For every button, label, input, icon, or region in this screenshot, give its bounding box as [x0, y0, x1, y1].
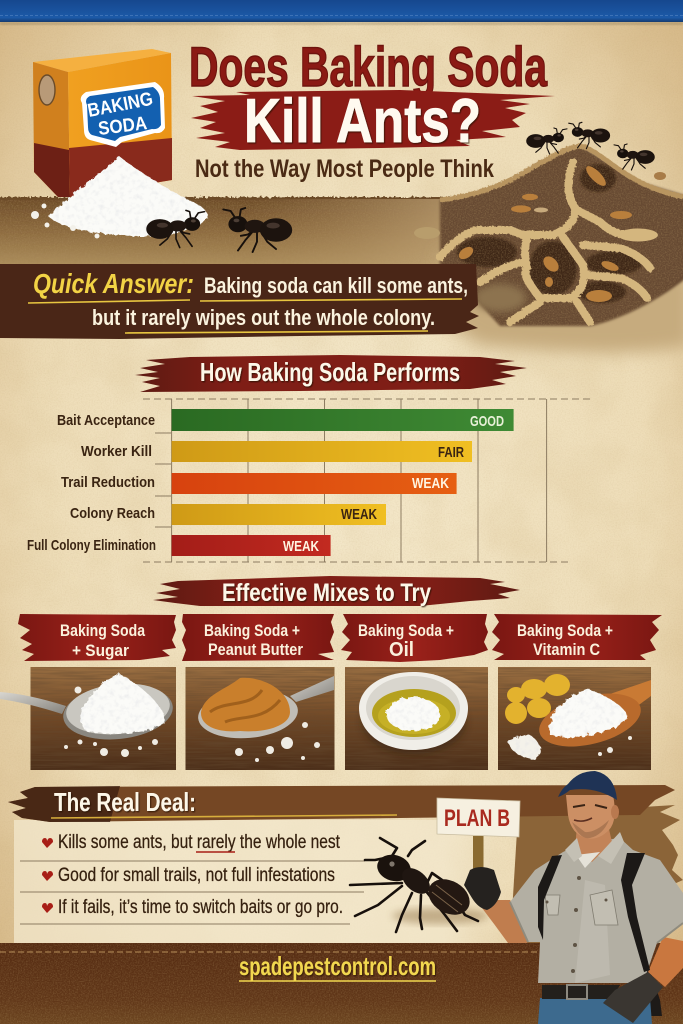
- bar: colony reach: Colony Reach: [70, 505, 155, 522]
- icon: large ant: [350, 838, 488, 932]
- dark banner end: [8, 786, 120, 822]
- bar: colony reach: WEAK: [341, 506, 377, 523]
- bar: full colony elimination: Full Colony Elimination: [27, 537, 156, 554]
- title line 1: Does Baking Soda: [189, 35, 548, 98]
- mix label 4: Baking Soda +: [517, 622, 613, 640]
- bar: trail reduction: [61, 473, 457, 494]
- heading: effective mixes to try: [153, 576, 520, 607]
- panel: baking soda + vitamin c: [492, 614, 662, 770]
- box top: [33, 49, 171, 72]
- blue label: [81, 82, 165, 147]
- mix label 2: Peanut Butter: [208, 641, 303, 659]
- collar: [565, 832, 624, 864]
- box front: [68, 53, 172, 197]
- nest soil: [440, 145, 683, 326]
- bar: bait acceptance: GOOD: [470, 413, 504, 430]
- bar: full colony elimination: [27, 535, 331, 556]
- icon: plan b sign: [437, 798, 520, 872]
- website url: spadepestcontrol.com: [239, 951, 436, 981]
- larvae: [414, 163, 666, 302]
- mix photo 2: [186, 667, 334, 770]
- list item 1: Kills some ants, but rarely the whole nest: [58, 832, 341, 853]
- list item 2: Good for small trails, not full infestations: [58, 865, 335, 886]
- bar: trail reduction: WEAK: [412, 475, 449, 492]
- title line 2: Kill Ants?: [244, 87, 481, 156]
- mix photo 3: [345, 667, 488, 770]
- footer band: [0, 943, 683, 1024]
- title brush banner: [191, 90, 555, 150]
- suspender straps: [538, 855, 562, 940]
- list item 3: If it fails, it’s time to switch baits or go pro.: [58, 897, 343, 918]
- neck and undershirt: [575, 825, 612, 862]
- bar: worker kill: [81, 441, 472, 462]
- mix label 4: Vitamin C: [533, 641, 600, 659]
- bar: worker kill: FAIR: [438, 444, 464, 461]
- answer line 1: Baking soda can kill some ants,: [204, 273, 468, 298]
- cap: [558, 771, 617, 800]
- mix label 3: Oil: [389, 639, 414, 661]
- bar: bait acceptance: [57, 409, 514, 431]
- bar: worker kill: Worker Kill: [81, 443, 152, 460]
- light list backdrop: [14, 820, 519, 944]
- panel: quick answer: [0, 264, 479, 339]
- shirt: [510, 838, 683, 983]
- blue label: SODA: [97, 113, 148, 140]
- box side: [33, 62, 70, 197]
- mix label 2: Baking Soda +: [204, 622, 300, 640]
- side seal: [39, 75, 55, 105]
- mix label 1: [18, 614, 176, 661]
- heading: effective mixes to try: Effective Mixes to Try: [222, 579, 431, 607]
- side chamber: [618, 228, 658, 242]
- chart grid: [143, 399, 594, 562]
- raised forearm: [482, 900, 528, 943]
- brown panel backdrop: [510, 805, 683, 945]
- shirt cuff line: [510, 902, 683, 943]
- figure: pest control technician: [464, 771, 683, 1024]
- bar chart: performance ratings: [27, 399, 594, 562]
- right forearm: [648, 937, 683, 987]
- top blue band: [0, 0, 683, 25]
- blue label: BAKING: [86, 89, 155, 122]
- ants on mound: [526, 122, 655, 170]
- quick answer label: Quick Answer:: [33, 268, 194, 299]
- belt: [542, 985, 620, 999]
- title: [189, 35, 555, 183]
- shirt buttons: [546, 876, 608, 973]
- bar: bait acceptance: Bait Acceptance: [57, 412, 155, 429]
- subtitle: Not the Way Most People Think: [195, 155, 494, 183]
- bar: colony reach: [70, 504, 386, 525]
- ant nest cross-section: [414, 145, 683, 353]
- bar: trail reduction: Trail Reduction: [61, 474, 155, 491]
- dark chambers: [457, 164, 642, 303]
- mix label 4: [492, 614, 662, 660]
- baking soda box: [33, 49, 172, 197]
- backpack: [640, 940, 662, 1016]
- heading: how baking soda performs: [135, 355, 527, 392]
- answer line 2: but it rarely wipes out the whole colony.: [92, 305, 435, 330]
- real deal banner: [8, 785, 675, 822]
- head: [566, 795, 615, 839]
- mix label 3: Baking Soda +: [358, 622, 454, 640]
- mix label 1: + Sugar: [72, 642, 130, 660]
- powder pile: [31, 157, 207, 238]
- mix label 1: Baking Soda: [60, 622, 146, 640]
- panel: baking soda + peanut butter: [182, 614, 334, 770]
- nest sand base: [440, 235, 683, 353]
- sandy soil patch: [474, 284, 526, 312]
- mix label 2: [182, 614, 334, 661]
- panel: baking soda + sugar: [0, 614, 176, 770]
- soil grain: [440, 145, 683, 330]
- real deal heading: The Real Deal:: [54, 787, 196, 817]
- panel: baking soda + oil: [341, 614, 488, 770]
- mix label 3: [341, 614, 488, 662]
- icon: plan b sign: PLAN B: [444, 805, 510, 832]
- heading: how baking soda performs: How Baking Soda Performs: [200, 357, 460, 387]
- mix photo 1: [0, 667, 176, 770]
- mound crust: [440, 146, 683, 200]
- holding glove: [464, 867, 501, 910]
- tunnels: [440, 162, 650, 322]
- panel: the real deal: [8, 785, 683, 945]
- ground strip: [0, 197, 488, 269]
- bar: full colony elimination: WEAK: [283, 538, 319, 555]
- jeans: [538, 998, 652, 1024]
- right glove: [603, 972, 663, 1023]
- mix photo 4: [498, 667, 651, 770]
- ants on ground: [146, 208, 292, 252]
- shirt shading: [575, 880, 610, 983]
